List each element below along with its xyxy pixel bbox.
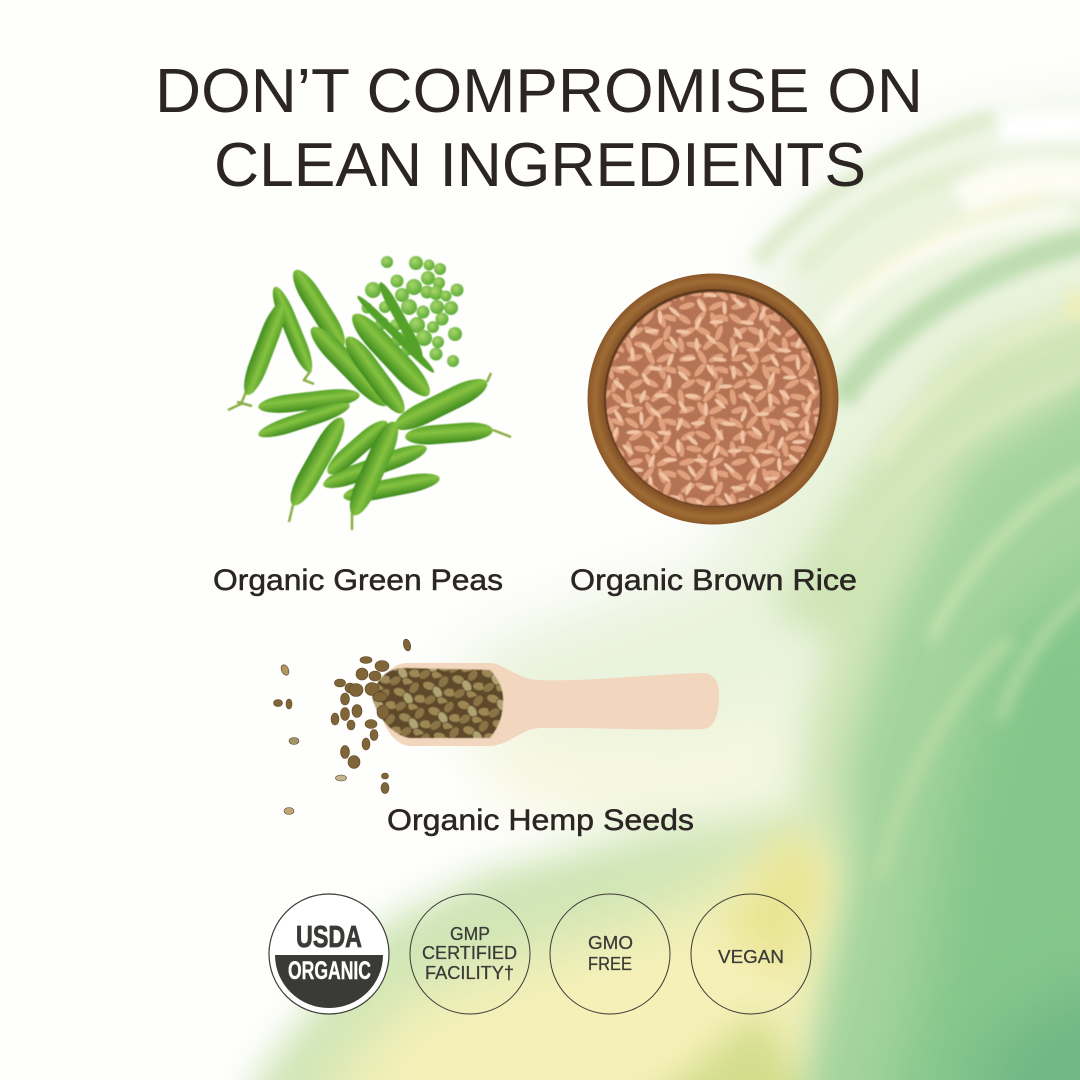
title xyxy=(155,57,923,200)
title: CLEAN INGREDIENTS xyxy=(214,131,866,200)
badge: USDA organic: USDA xyxy=(296,919,362,954)
badge: vegan xyxy=(691,894,811,1014)
icon: wooden bowl of brown rice xyxy=(588,274,838,524)
badge: GMO free xyxy=(550,894,670,1014)
badge: GMP certified facility: CERTIFIED xyxy=(422,943,517,963)
badge: GMP certified facility: FACILITY† xyxy=(425,963,514,983)
title: DON’T COMPROMISE ON xyxy=(155,57,923,126)
badge: USDA organic: ORGANIC xyxy=(288,957,371,985)
loose peas xyxy=(362,256,464,367)
badge: GMO free: GMO xyxy=(588,933,633,953)
icon: wooden scoop of hemp seeds xyxy=(274,638,719,814)
label: organic hemp seeds: Organic Hemp Seeds xyxy=(387,804,694,837)
icon: green pea pods and loose peas xyxy=(228,256,511,530)
label: organic brown rice: Organic Brown Rice xyxy=(570,564,857,597)
badge: GMO free: FREE xyxy=(588,954,632,974)
badge: USDA organic xyxy=(269,894,389,1014)
badge: GMP certified facility xyxy=(410,894,530,1014)
scattered hemp seeds xyxy=(274,638,412,814)
label: organic green peas: Organic Green Peas xyxy=(213,564,503,597)
hemp seeds in the scoop xyxy=(372,668,503,738)
badge: GMP certified facility: GMP xyxy=(450,924,490,944)
badge: vegan: VEGAN xyxy=(718,947,784,967)
